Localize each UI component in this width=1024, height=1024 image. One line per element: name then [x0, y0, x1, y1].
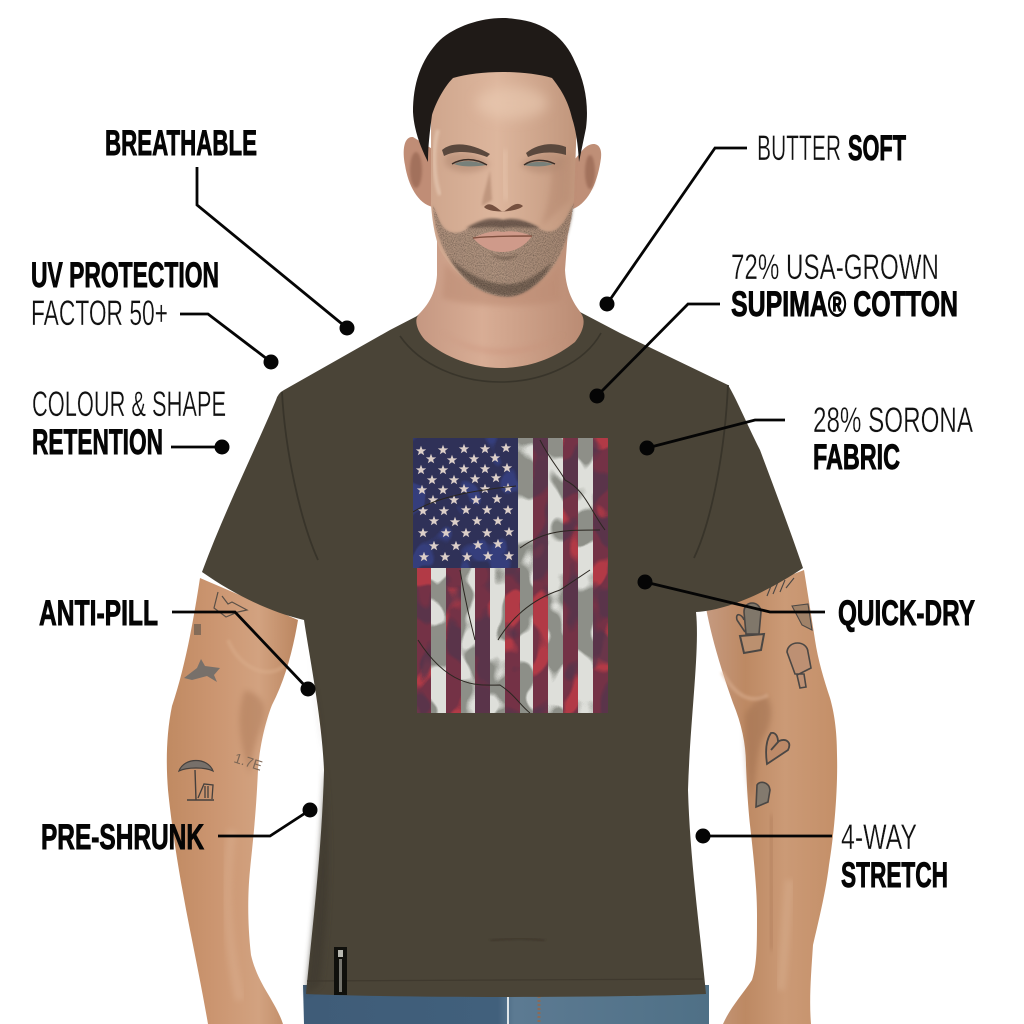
nose: [482, 170, 523, 212]
callout: anti-pill: ANTI-PILL: [39, 594, 158, 633]
beard: [430, 200, 576, 300]
right arm: [706, 570, 837, 1024]
model photo: [167, 18, 837, 1024]
left arm tattoos: [179, 592, 247, 800]
flag print: [413, 438, 608, 713]
white stripe camouflage: [431, 438, 593, 713]
callout: 4-way stretch: [696, 818, 948, 895]
ear shadows: [410, 152, 595, 189]
collar: [400, 333, 601, 382]
callout: butter soft: SOFT: [848, 129, 906, 168]
callout: colour and shape retention: COLOUR & SHAPE: [32, 385, 226, 424]
callout: pre-shrunk: [41, 802, 318, 857]
callout: uv protection: FACTOR 50+: [31, 294, 168, 333]
lips: [473, 231, 532, 252]
callout: colour and shape retention: RETENTION: [32, 423, 163, 462]
right arm muscle shading: [722, 672, 790, 990]
callout: quick-dry: [638, 574, 975, 633]
ears: [404, 137, 434, 207]
callout: uv protection: [31, 256, 278, 370]
neck shading: [440, 262, 570, 353]
callout: supima cotton: 72% USA-GROWN: [731, 248, 939, 287]
callout: uv protection: UV PROTECTION: [31, 256, 219, 295]
callout: supima cotton: [590, 248, 958, 404]
callout: 4-way stretch: STRETCH: [841, 856, 948, 895]
callout: butter soft: [600, 129, 906, 312]
jeans: [303, 985, 709, 1024]
shirt grain and folds: [304, 620, 703, 994]
eyes and brows: [442, 144, 566, 166]
callout: 4-way stretch: 4-WAY: [841, 818, 917, 857]
canton: [413, 438, 518, 568]
t-shirt: [202, 312, 803, 997]
callout: breathable: [105, 124, 354, 336]
mouth line: [473, 236, 532, 238]
stars: [416, 443, 514, 561]
neck: [412, 230, 588, 380]
left arm small text tattoo: 1.7E: [232, 750, 264, 774]
callout: breathable: BREATHABLE: [105, 124, 257, 163]
callout: anti-pill: [39, 594, 316, 696]
sleeve seams: [282, 385, 728, 560]
face light and shade: [434, 87, 572, 228]
left arm muscle shading: [227, 640, 285, 1000]
callout: pre-shrunk: PRE-SHRUNK: [41, 818, 204, 857]
woven label: [334, 947, 347, 995]
callout: sorona fabric: [640, 401, 973, 477]
callout: colour and shape retention: [32, 385, 230, 462]
callout: butter soft: BUTTER: [757, 129, 841, 168]
right arm tattoos: [737, 578, 812, 807]
left arm: [167, 578, 298, 1024]
callout: sorona fabric: FABRIC: [813, 438, 900, 477]
cracks: [413, 440, 605, 713]
face: [431, 68, 578, 296]
hair: [413, 18, 587, 162]
red stripes: [413, 438, 608, 713]
